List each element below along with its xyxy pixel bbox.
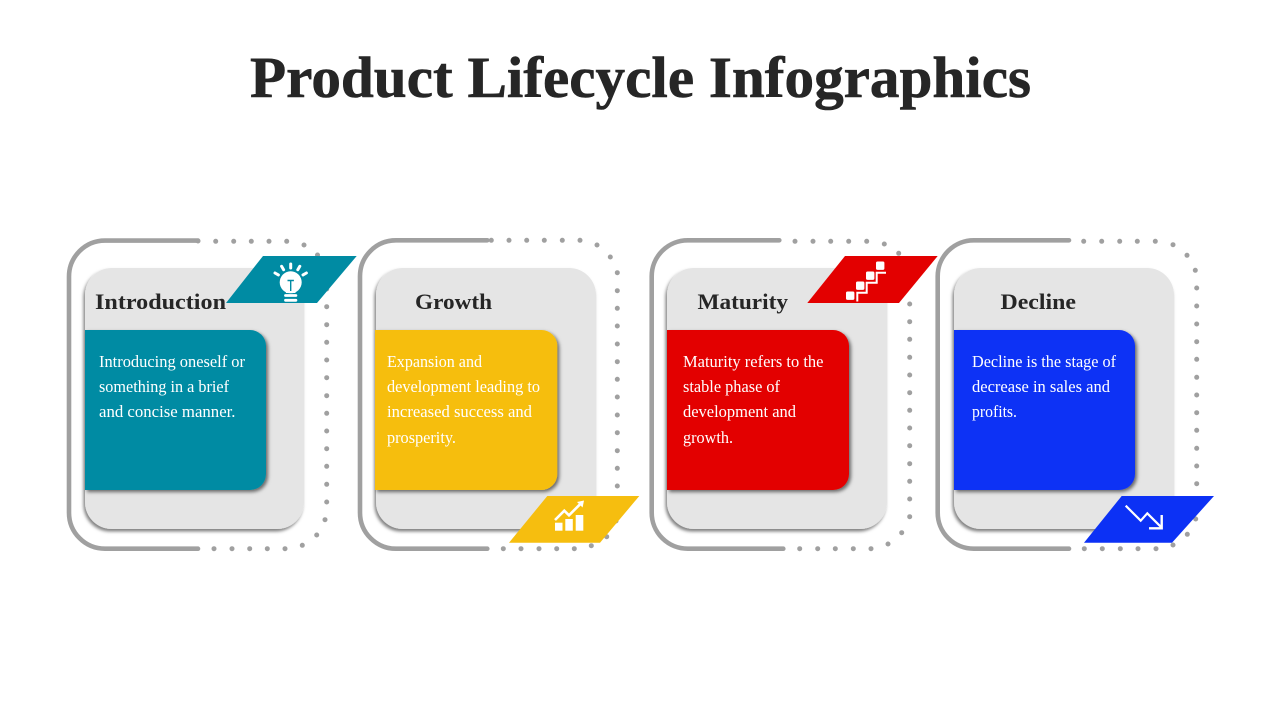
body text: decrease in sales and	[972, 377, 1111, 396]
outer solid bracket	[360, 240, 487, 549]
heading: Growth	[415, 289, 492, 314]
grey card	[667, 268, 887, 529]
body text	[387, 352, 540, 447]
body text: stable phase of	[683, 377, 780, 396]
body text: Decline is the stage of	[972, 352, 1116, 371]
icon: rising bar chart	[555, 500, 584, 531]
teal parallelogram tag	[226, 256, 357, 303]
yellow text box	[375, 330, 557, 490]
outer dotted bracket	[1084, 241, 1197, 549]
blue text box	[954, 330, 1135, 490]
outer dotted bracket	[795, 241, 910, 549]
outer solid bracket	[938, 240, 1069, 549]
body text: development leading to	[387, 377, 540, 396]
outer dotted bracket	[491, 240, 617, 549]
body text	[972, 352, 1116, 421]
body text: growth.	[683, 428, 733, 447]
body text: something in a brief	[99, 377, 229, 396]
body text: development and	[683, 402, 797, 421]
heading: Introduction	[95, 289, 227, 314]
panel: Maturity	[652, 240, 938, 549]
body text: profits.	[972, 402, 1017, 421]
title: Product Lifecycle Infographics	[250, 45, 1031, 110]
body text: Maturity refers to the	[683, 352, 824, 371]
grey card	[376, 268, 596, 529]
yellow parallelogram tag	[509, 496, 639, 543]
body text: prosperity.	[387, 428, 456, 447]
outer solid bracket	[652, 240, 783, 549]
red text box	[667, 330, 849, 490]
panel: Introduction	[69, 241, 357, 549]
icon: light bulb	[275, 264, 306, 300]
grey card	[954, 268, 1174, 529]
icon: stairs	[846, 262, 886, 302]
grey card	[85, 268, 304, 529]
body text: increased success and	[387, 402, 533, 421]
outer solid bracket	[69, 241, 198, 549]
icon: falling arrow	[1126, 506, 1162, 528]
outer dotted bracket	[198, 241, 327, 549]
blue parallelogram tag	[1084, 496, 1214, 543]
body text: Expansion and	[387, 352, 483, 371]
panel: Growth	[360, 240, 639, 549]
body text	[683, 352, 824, 447]
body text: Introducing oneself or	[99, 352, 246, 371]
panel: Decline	[938, 240, 1214, 549]
body text: and concise manner.	[99, 402, 236, 421]
teal text box	[85, 330, 266, 490]
heading: Maturity	[698, 289, 789, 314]
red parallelogram tag	[807, 256, 938, 303]
body text	[99, 352, 246, 421]
heading: Decline	[1000, 289, 1076, 314]
